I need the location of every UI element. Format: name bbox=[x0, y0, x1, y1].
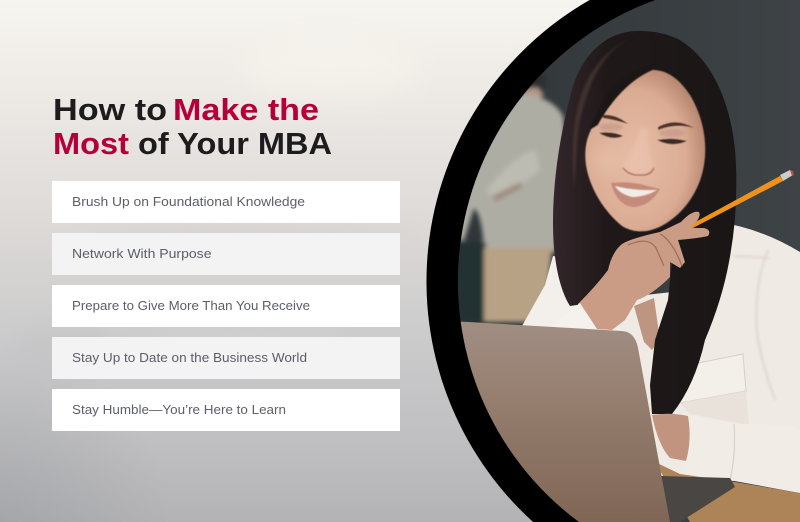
laptop lid bbox=[450, 321, 670, 522]
hair strand over forehead bbox=[590, 66, 653, 130]
eyebrows bbox=[603, 115, 628, 124]
table bbox=[655, 462, 800, 522]
list item 1 bbox=[52, 181, 400, 223]
eye shadow right bbox=[659, 129, 685, 137]
list item 5: Stay Humble—You’re Here to Learn bbox=[72, 402, 286, 417]
list item 5 bbox=[52, 389, 400, 431]
left cuff bbox=[578, 303, 597, 329]
list item 3: Prepare to Give More Than You Receive bbox=[72, 298, 310, 313]
list item 1: Brush Up on Foundational Knowledge bbox=[72, 194, 305, 209]
title: Most bbox=[53, 127, 129, 161]
cheek highlight bbox=[604, 158, 605, 159]
shirt cuff bbox=[732, 424, 800, 493]
pencil bbox=[688, 170, 794, 229]
hair bbox=[553, 31, 736, 414]
black circular ring bbox=[426, 0, 800, 522]
face bbox=[585, 66, 705, 231]
lips bbox=[611, 182, 660, 207]
list item 3 bbox=[52, 285, 400, 327]
list item 4: Stay Up to Date on the Business World bbox=[72, 350, 307, 365]
list item 4 bbox=[52, 337, 400, 379]
list item 2 bbox=[52, 233, 400, 275]
title: of Your MBA bbox=[138, 127, 332, 161]
photo: woman studying at laptop bbox=[440, 0, 800, 522]
eye shadow bbox=[599, 123, 623, 131]
dark brick wall bbox=[440, 0, 800, 522]
shirt pocket bbox=[680, 354, 746, 403]
hand on keyboard bbox=[652, 414, 690, 461]
list item 2: Network With Purpose bbox=[72, 246, 212, 261]
blurred person in background bbox=[456, 72, 565, 322]
shirt bbox=[522, 222, 800, 493]
eyes bbox=[599, 132, 623, 138]
title: Make the bbox=[173, 93, 319, 127]
title: How to bbox=[53, 93, 167, 127]
teeth bbox=[615, 186, 657, 197]
laptop base bbox=[662, 476, 735, 522]
title bbox=[53, 93, 332, 161]
hand under chin bbox=[578, 212, 709, 330]
nose bbox=[640, 130, 649, 168]
